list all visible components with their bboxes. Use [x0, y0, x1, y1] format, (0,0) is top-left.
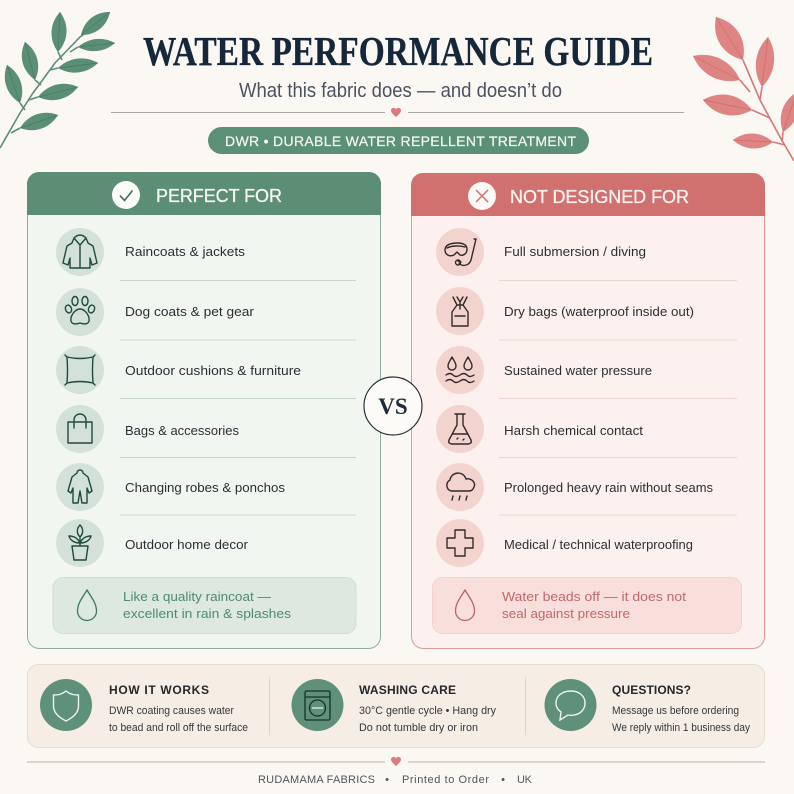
item: changing robes: [56, 463, 285, 511]
callout: raincoat: Like a quality raincoat —: [123, 589, 271, 604]
info bar: [28, 664, 764, 748]
info: washing care: [292, 679, 496, 734]
VS badge: [364, 377, 422, 435]
info: questions: QUESTIONS?: [612, 683, 691, 697]
info: washing care: Do not tumble dry or iron: [359, 722, 478, 734]
info: questions: We reply within 1 business day: [612, 722, 750, 734]
header divider with heart: [111, 108, 684, 117]
panel header: not designed for: NOT DESIGNED FOR: [510, 187, 689, 207]
item: sustained water pressure: [436, 346, 652, 394]
item: sustained water pressure: Sustained water pressure: [504, 363, 652, 378]
footer divider with heart: [27, 757, 765, 766]
item: medical waterproofing: [436, 519, 693, 567]
item: dog coats: Dog coats & pet gear: [125, 304, 255, 319]
item: raincoats: [56, 228, 246, 276]
item: bags: Bags & accessories: [125, 423, 239, 438]
footer text: UK: [517, 774, 533, 786]
item: dog coats: [56, 288, 255, 336]
panel header: perfect for: PERFECT FOR: [156, 186, 282, 206]
info: how it works: [40, 679, 248, 734]
panel header: perfect for: [27, 172, 381, 215]
callout: water beads off: seal against pressure: [502, 606, 630, 621]
badge: DWR treatment: DWR • DURABLE WATER REPELLENT TREATMENT: [225, 133, 576, 149]
callout: raincoat: [53, 578, 356, 634]
title: WATER PERFORMANCE GUIDE: [143, 28, 653, 74]
info: questions: [544, 679, 750, 734]
item: prolonged heavy rain: Prolonged heavy rain without seams: [504, 480, 713, 495]
icon: pink leaf branch: [693, 17, 794, 161]
item: prolonged heavy rain: [436, 463, 713, 511]
callout: water beads off: [432, 578, 742, 634]
item: dry bags: [436, 287, 694, 335]
item: changing robes: Changing robes & ponchos: [125, 480, 285, 495]
info: how it works: HOW IT WORKS: [109, 683, 209, 697]
badge: DWR treatment: [208, 127, 589, 154]
subtitle: What this fabric does — and doesn’t do: [239, 80, 562, 102]
item: bags: [56, 405, 239, 453]
item: outdoor home decor: Outdoor home decor: [125, 537, 249, 552]
info: how it works: DWR coating causes water: [109, 705, 234, 717]
panel: perfect for: [27, 172, 381, 648]
footer text: [258, 774, 533, 786]
item: dry bags: Dry bags (waterproof inside out): [504, 304, 694, 319]
VS badge: VS: [378, 394, 408, 419]
info: washing care: WASHING CARE: [359, 683, 456, 697]
item: medical waterproofing: Medical / technical waterproofing: [504, 537, 693, 552]
item: outdoor home decor: [56, 519, 249, 567]
callout: raincoat: excellent in rain & splashes: [123, 606, 292, 621]
item: harsh chemical contact: Harsh chemical contact: [504, 423, 643, 438]
info: washing care: 30°C gentle cycle • Hang dry: [359, 705, 496, 717]
item: raincoats: Raincoats & jackets: [125, 244, 246, 259]
footer text: •: [385, 774, 389, 786]
item: harsh chemical contact: [436, 405, 643, 453]
icon: green leaf branch: [0, 12, 115, 148]
item: outdoor cushions: [56, 346, 301, 394]
footer text: Printed to Order: [402, 774, 489, 786]
item: full submersion: Full submersion / diving: [504, 244, 646, 259]
item: full submersion: [436, 228, 646, 276]
info: how it works: to bead and roll off the surface: [109, 722, 248, 734]
panel: not designed for: [411, 173, 765, 648]
panel header: not designed for: [411, 173, 765, 216]
info: questions: Message us before ordering: [612, 705, 739, 717]
footer text: RUDAMAMA FABRICS: [258, 774, 375, 786]
footer text: •: [501, 774, 505, 786]
item: outdoor cushions: Outdoor cushions & furniture: [125, 363, 301, 378]
callout: water beads off: Water beads off — it does not: [502, 589, 686, 604]
